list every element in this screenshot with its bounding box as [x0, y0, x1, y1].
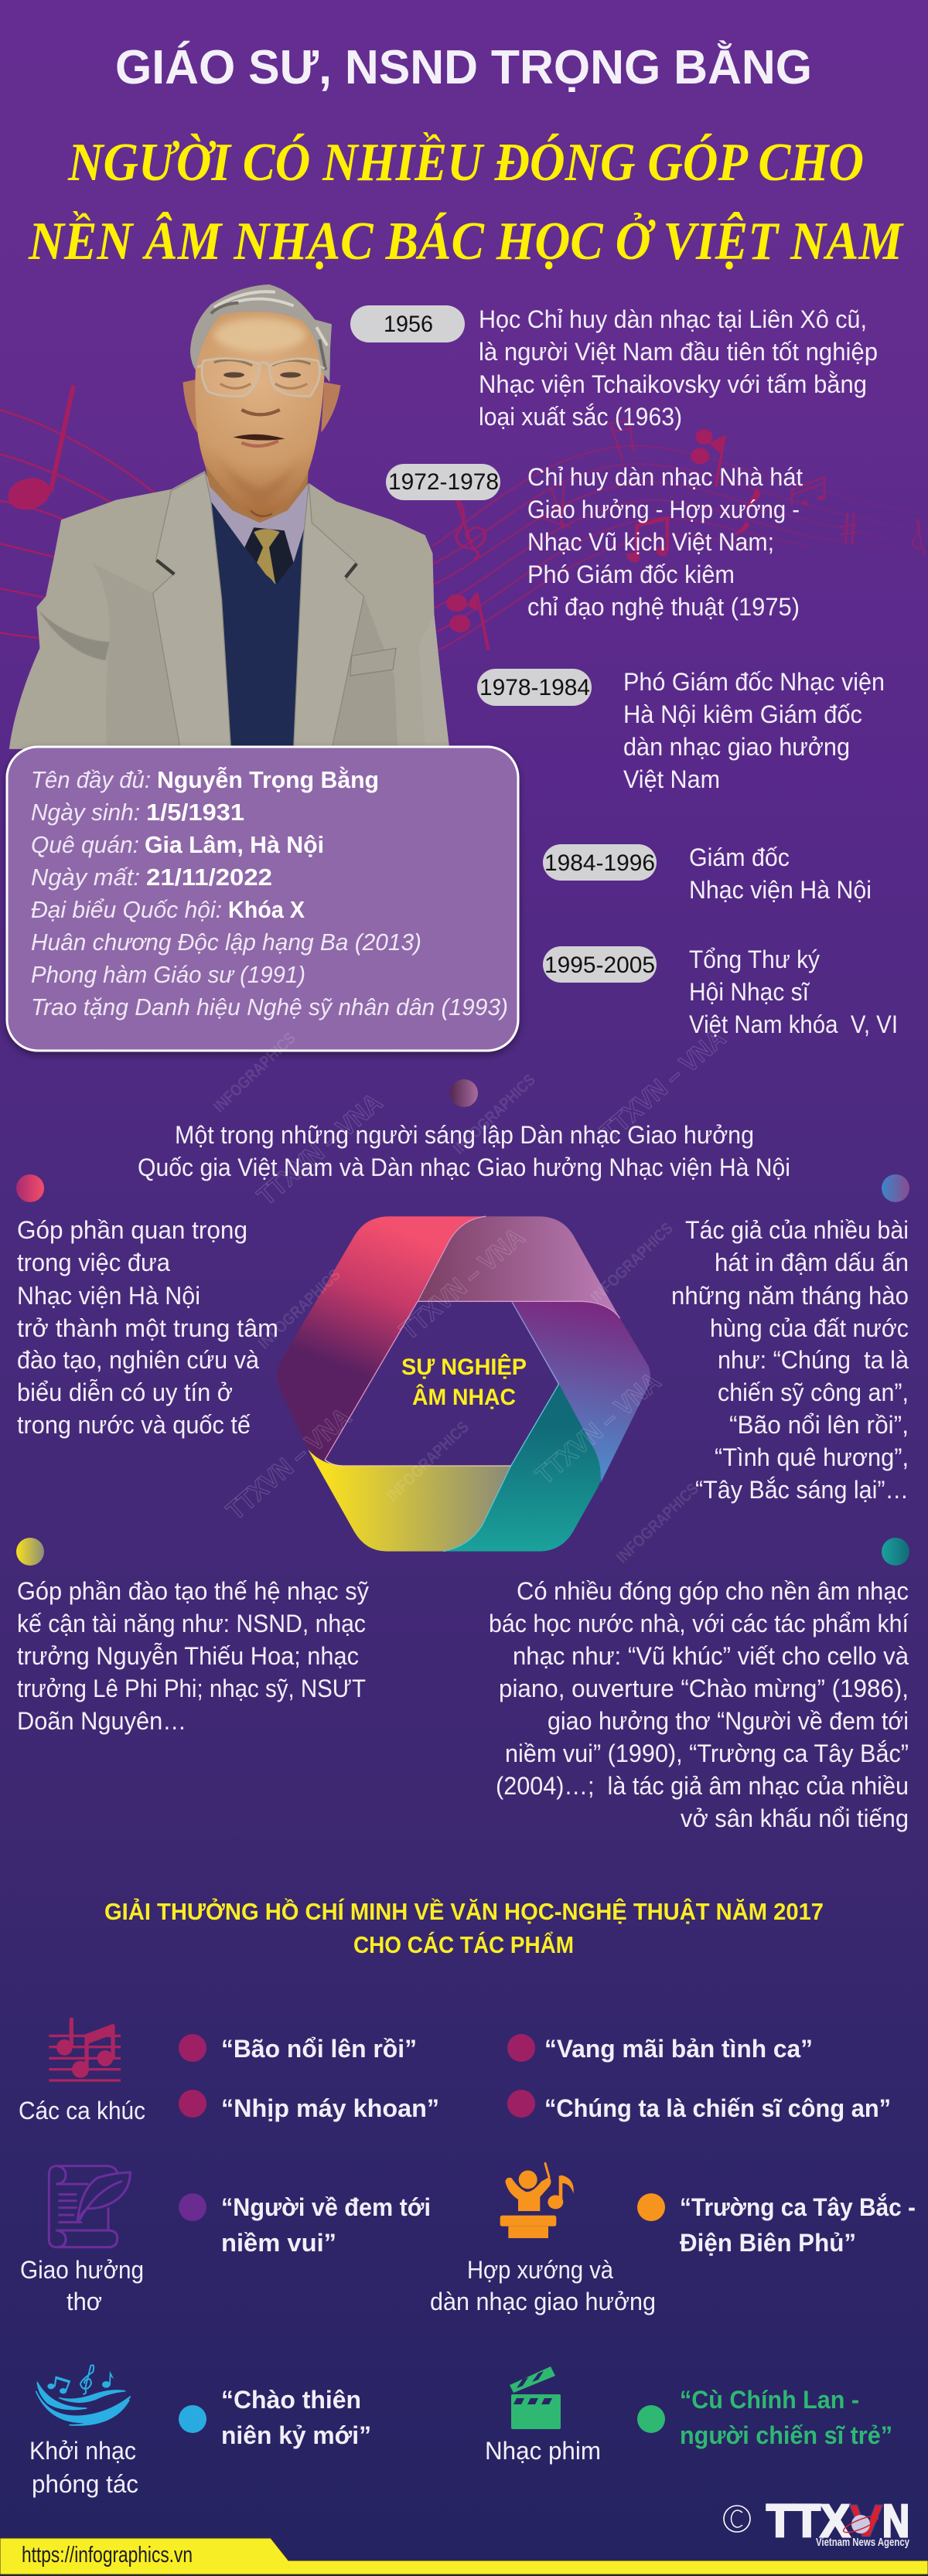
career text: lower left: Góp phần đào tạo thế hệ nhạc sỹ — [17, 1577, 369, 1605]
work: Chào thiên niên kỷ mới: niên kỷ mới” — [221, 2421, 371, 2449]
label: dàn nhạc giao hưởng — [430, 2288, 656, 2315]
portrait photo — [9, 285, 449, 749]
timeline item 1995-2005: Tổng Thư ký — [689, 946, 820, 973]
work: Cù Chính Lan - người chiến sĩ trẻ: “Cù Chính Lan - — [680, 2386, 859, 2414]
career point: right blue dot — [882, 1174, 909, 1202]
career point: right teal dot — [882, 1538, 909, 1566]
footer bar: https://infographics.vn — [22, 2543, 193, 2567]
music notes right — [432, 420, 928, 651]
label — [20, 2256, 144, 2315]
work: Người về đem tới niềm vui: “Người về đem tới — [221, 2193, 431, 2221]
panel: biography card: Khóa X — [228, 896, 305, 923]
career text: lower right — [489, 1577, 909, 1832]
tie — [244, 527, 294, 584]
career text: left: Góp phần quan trọng — [17, 1216, 247, 1244]
diagram label: ÂM NHẠC — [412, 1384, 516, 1410]
copyright logo: V — [849, 2496, 883, 2547]
career text: lower right: vở sân khấu nổi tiếng — [681, 1804, 909, 1832]
career text: right: những năm tháng hào — [671, 1282, 909, 1310]
career text: lower right: (2004)…; là tác giả âm nhạc của nhiều — [496, 1772, 909, 1800]
timeline item 1978-1984: dàn nhạc giao hưởng — [623, 733, 850, 761]
facial shading — [214, 318, 305, 506]
timeline item 1956: Học Chỉ huy dàn nhạc tại Liên Xô cũ, — [479, 305, 867, 333]
icon: waves and notes — [36, 2365, 130, 2425]
awards heading: CHO CÁC TÁC PHẨM — [353, 1931, 574, 1958]
career text: lower left: trưởng Nguyễn Thiếu Hoa; nhạc — [17, 1642, 359, 1670]
timeline item 1972-1978: Phó Giám đốc kiêm — [527, 561, 735, 588]
career text: right: hùng của đất nước — [710, 1314, 909, 1342]
title: GIÁO SƯ, NSND TRỌNG BẰNG — [115, 41, 812, 94]
timeline item 1978-1984: 1978-1984 — [479, 675, 590, 700]
panel: biography card: Đại biểu Quốc hội: — [31, 896, 222, 923]
awards: film music — [485, 2366, 892, 2465]
ribbon: mauve — [416, 1216, 620, 1318]
career text: left: trở thành một trung tâm — [17, 1314, 278, 1342]
icon: scroll and quill — [49, 2166, 130, 2247]
panel: biography card: Quê quán: — [31, 831, 139, 858]
career text: lower left — [17, 1577, 369, 1735]
awards heading: GIẢI THƯỞNG HỒ CHÍ MINH VỀ VĂN HỌC-NGHỆ THUẬT NĂM 2017 — [104, 1897, 824, 1925]
career point: top dot — [450, 1079, 478, 1107]
timeline item 1956: 1956 — [384, 312, 433, 337]
timeline item 1978-1984 — [477, 668, 885, 793]
career text: lower left: kế cận tài năng như: NSND, nhạc — [17, 1610, 366, 1637]
panel: biography card: Trao tặng Danh hiệu Nghệ sỹ nhân dân (1993) — [31, 993, 508, 1021]
awards: overture — [29, 2365, 371, 2498]
timeline item 1995-2005: Việt Nam khóa V, VI — [689, 1010, 898, 1038]
career text: left: trong việc đưa — [17, 1249, 170, 1276]
awards: choral and orchestral — [430, 2163, 916, 2315]
timeline item 1972-1978: chỉ đạo nghệ thuật (1975) — [527, 593, 800, 621]
copyright logo — [724, 2496, 909, 2549]
work: Cù Chính Lan - người chiến sĩ trẻ — [637, 2386, 892, 2449]
career text: founder: Quốc gia Việt Nam và Dàn nhạc Giao hưởng Nhạc viện Hà Nội — [138, 1153, 790, 1181]
awards: songs — [19, 2017, 891, 2125]
diagram label: SỰ NGHIỆP — [401, 1354, 527, 1380]
career text: lower right: giao hưởng thơ “Người về đem tới — [548, 1707, 909, 1735]
career text: left: trong nước và quốc tế — [17, 1411, 251, 1439]
icon: conductor — [500, 2163, 574, 2238]
watermarks: INFOGRAPHICS — [613, 1480, 702, 1567]
career text: lower right: piano, ouverture “Chào mừng” (1986), — [499, 1675, 909, 1702]
hair — [190, 285, 332, 382]
work: Người về đem tới niềm vui — [179, 2193, 431, 2257]
timeline item 1995-2005 — [543, 946, 898, 1038]
career text: right: “Tây Bắc sáng lại”… — [695, 1476, 909, 1504]
ribbon: blue purple — [512, 1301, 650, 1483]
work: Cù Chính Lan - người chiến sĩ trẻ: người chiến sĩ trẻ” — [680, 2421, 892, 2449]
shirt collar — [210, 483, 309, 563]
career text: lower right: bác học nước nhà, với các tác phẩm khí — [489, 1610, 909, 1637]
timeline item 1956: Nhạc viện Tchaikovsky với tấm bằng — [479, 370, 867, 398]
timeline item 1995-2005: Hội Nhạc sĩ — [689, 978, 810, 1006]
timeline item 1972-1978 — [386, 463, 803, 621]
label: Khởi nhạc — [29, 2437, 136, 2465]
career text: left: Nhạc viện Hà Nội — [17, 1282, 200, 1310]
neck — [205, 465, 309, 523]
career text: lower right: niềm vui” (1990), “Trường ca Tây Bắc” — [505, 1739, 909, 1767]
timeline item 1984-1996: Nhạc viện Hà Nội — [689, 876, 872, 904]
career text: left: biểu diễn có uy tín ở — [17, 1378, 233, 1406]
work: Chào thiên niên kỷ mới: “Chào thiên — [221, 2386, 361, 2414]
career text: right: chiến sỹ công an”, — [718, 1378, 909, 1406]
career text: right: Tác giả của nhiều bài — [685, 1216, 909, 1244]
jacket pocket — [350, 648, 396, 676]
label: phóng tác — [32, 2470, 138, 2498]
timeline item 1956: loại xuất sắc (1963) — [479, 403, 682, 431]
label — [430, 2256, 656, 2315]
career text: founder — [138, 1121, 790, 1181]
watermarks: TTXVN – VNA — [394, 1222, 531, 1346]
timeline item 1978-1984: Việt Nam — [623, 765, 720, 793]
panel: biography card: 21/11/2022 — [146, 864, 272, 891]
icon: clapperboard — [510, 2366, 561, 2429]
ribbon: teal — [443, 1384, 601, 1552]
work: Trường ca Tây Bắc - Điện Biên Phủ: “Trường ca Tây Bắc - — [680, 2193, 916, 2221]
panel: biography card: Huân chương Độc lập hạng Ba (2013) — [31, 929, 421, 956]
career point: left red dot — [16, 1174, 44, 1202]
work: Chào thiên niên kỷ mới — [179, 2386, 371, 2449]
timeline item 1995-2005: 1995-2005 — [544, 952, 655, 978]
career text: founder: Một trong những người sáng lập Dàn nhạc Giao hưởng — [175, 1121, 754, 1149]
panel: biography card: Phong hàm Giáo sư (1991) — [31, 961, 305, 988]
awards: symphonic poem — [20, 2166, 431, 2315]
label: Hợp xướng và — [467, 2256, 613, 2284]
timeline item 1984-1996 — [543, 843, 872, 904]
glasses — [197, 359, 325, 397]
ribbon: red — [276, 1216, 486, 1460]
vest — [210, 499, 305, 749]
career text: lower left: trưởng Lê Phi Phi; nhạc sỹ, NSƯT — [17, 1675, 366, 1702]
timeline item 1972-1978: 1972-1978 — [388, 469, 499, 495]
watermarks: TTXVN – VNA — [221, 1402, 357, 1526]
timeline item 1978-1984: Phó Giám đốc Nhạc viện — [623, 668, 885, 696]
timeline item 1956 — [350, 305, 878, 431]
timeline — [350, 305, 898, 1038]
career point: left yellow dot — [16, 1538, 44, 1566]
career text: lower right: Có nhiều đóng góp cho nền âm nhạc — [517, 1577, 909, 1605]
watermarks: TTXVN – VNA — [595, 1024, 732, 1147]
panel: biography card: Tên đầy đủ: — [31, 766, 151, 793]
panel: biography card: Gia Lâm, Hà Nội — [145, 831, 324, 858]
watermarks: INFOGRAPHICS — [384, 1418, 473, 1505]
timeline item 1972-1978: Chỉ huy dàn nhạc Nhà hát — [527, 463, 803, 491]
label: Các ca khúc — [19, 2097, 145, 2125]
career text: right: như: “Chúng ta là — [718, 1346, 909, 1374]
jacket lapels — [153, 472, 364, 749]
career text: right: “Tình quê hương”, — [715, 1443, 909, 1471]
career text: left: đào tạo, nghiên cứu và — [17, 1346, 259, 1374]
career text: right — [671, 1216, 909, 1504]
work: Bão nổi lên rồi: “Bão nổi lên rồi” — [221, 2035, 417, 2063]
watermarks: TTXVN – VNA — [531, 1367, 667, 1491]
work: Vang mãi bản tình ca: “Vang mãi bản tình ca” — [544, 2035, 813, 2063]
career text: lower right: nhạc như: “Vũ khúc” viết cho cello và — [513, 1642, 909, 1670]
watermarks: INFOGRAPHICS — [255, 1266, 344, 1353]
icon: music staff — [49, 2017, 121, 2082]
subtitle: NGƯỜI CÓ NHIỀU ĐÓNG GÓP CHO — [67, 132, 864, 193]
awards heading — [104, 1897, 824, 1958]
watermarks — [210, 1024, 732, 1567]
timeline item 1956: là người Việt Nam đầu tiên tốt nghiệp — [479, 338, 878, 366]
copyright logo: TTX — [766, 2496, 850, 2547]
ribbon: yellow — [308, 1450, 511, 1552]
hexagon ribbon diagram — [276, 1216, 650, 1552]
face — [195, 310, 325, 520]
subtitle — [28, 132, 905, 271]
watermarks: TTXVN – VNA — [252, 1088, 388, 1211]
timeline item 1984-1996: 1984-1996 — [544, 850, 655, 876]
label: thơ — [67, 2288, 102, 2315]
timeline item 1972-1978: Nhạc Vũ kịch Việt Nam; — [527, 528, 774, 556]
career text: right: “Bão nổi lên rồi”, — [729, 1411, 909, 1439]
panel: biography card — [7, 747, 518, 1051]
timeline item 1984-1996: Giám đốc — [689, 843, 790, 871]
panel: biography card: 1/5/1931 — [146, 799, 244, 826]
label: Nhạc phim — [485, 2437, 601, 2465]
work: Trường ca Tây Bắc - Điện Biên Phủ — [637, 2193, 916, 2257]
copyright logo: N — [882, 2496, 909, 2547]
career text: right: hát in đậm dấu ấn — [715, 1249, 909, 1276]
label: Giao hưởng — [20, 2256, 144, 2284]
panel: biography card: Ngày mất: — [31, 864, 140, 891]
label — [29, 2437, 138, 2498]
panel: biography card: Nguyễn Trọng Bằng — [157, 765, 379, 793]
diagram label — [401, 1354, 527, 1410]
panel: biography card: Ngày sinh: — [31, 799, 140, 826]
watermarks: INFOGRAPHICS — [588, 1219, 677, 1307]
timeline item 1978-1984: Hà Nội kiêm Giám đốc — [623, 700, 862, 728]
music notes left — [0, 385, 156, 638]
watermarks: INFOGRAPHICS — [210, 1029, 299, 1116]
career text: left — [17, 1216, 278, 1439]
work: Nhịp máy khoan: “Nhịp máy khoan” — [221, 2094, 439, 2122]
work: Người về đem tới niềm vui: niềm vui” — [221, 2229, 336, 2257]
ears — [183, 379, 340, 433]
timeline item 1972-1978: Giao hưởng - Hợp xướng - — [527, 496, 800, 523]
work: Trường ca Tây Bắc - Điện Biên Phủ: Điện Biên Phủ” — [680, 2229, 856, 2257]
features — [214, 360, 310, 516]
career text: lower left: Doãn Nguyên… — [17, 1707, 186, 1735]
footer bar — [0, 2538, 928, 2576]
work: Chúng ta là chiến sĩ công an: “Chúng ta là chiến sĩ công an” — [544, 2094, 891, 2122]
watermarks: INFOGRAPHICS — [450, 1071, 539, 1158]
